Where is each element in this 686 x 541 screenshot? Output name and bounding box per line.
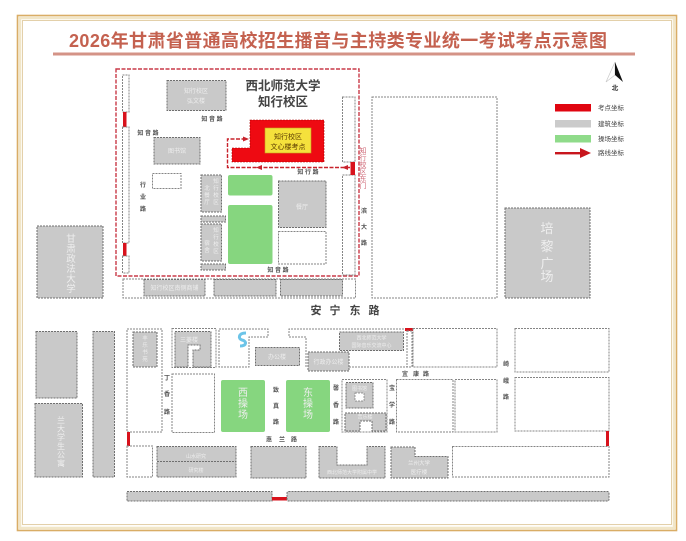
road label: 知 音 路 [137, 129, 159, 137]
south strip west [127, 492, 272, 501]
block west [127, 329, 162, 432]
building in block west [133, 332, 157, 367]
building [251, 446, 306, 478]
playground upper [228, 175, 272, 196]
far west building [36, 332, 77, 398]
road label: 宝学路 [389, 384, 395, 426]
blank plot [455, 380, 497, 432]
block with courtyard buildings [342, 380, 387, 432]
administration building [308, 352, 349, 371]
road label: 知 音 路 [201, 115, 223, 123]
arts centre building: 国际音乐交流中心 [351, 342, 392, 349]
building: Hongwen [167, 80, 226, 110]
office building [256, 348, 300, 366]
building: library: 图书馆 [168, 147, 186, 155]
title: 2026年甘肃省普通高校招生播音与主持类专业统一考试考点示意图 [69, 30, 607, 51]
office building: 办公楼 [268, 353, 286, 361]
block with L building: 三菱楼 [180, 336, 198, 344]
road label: 崎峨路 [503, 360, 509, 401]
notched building south: 医疗楼 [411, 468, 428, 476]
road label: 滨大路 [361, 207, 367, 247]
south strip east [287, 492, 609, 501]
road label: 知 行 路 [297, 168, 319, 176]
courtyard building: 图书馆 [352, 385, 367, 392]
U-shaped building south [319, 446, 385, 478]
red gate north [405, 328, 414, 331]
arts centre building [340, 332, 404, 350]
exam site label: 文心楼考点 [270, 142, 306, 151]
double building: 研究楼 [188, 467, 204, 474]
east gate [350, 162, 355, 175]
blank plot [396, 380, 453, 432]
road name: Anning East Road: 安宁东路 [310, 303, 380, 317]
east playground: 东操场 [303, 386, 313, 421]
blank plot [172, 374, 214, 432]
strip building [201, 216, 226, 222]
building: west dorm upper: 知行校区 [213, 177, 219, 206]
legend: 建筑坐标 [598, 119, 624, 128]
east side strips [342, 97, 355, 275]
road label: 丁香路 [164, 375, 170, 416]
building: canteen: 餐厅 [296, 203, 308, 211]
road label: 行业路 [140, 181, 146, 213]
building: Peili Square: 培黎广场 [540, 221, 554, 284]
blank plot [413, 328, 497, 367]
long building [93, 332, 114, 477]
legend: 考点坐标 [598, 103, 624, 112]
blank plot [515, 328, 609, 372]
shop row west: 知行校区南侧商铺 [150, 284, 199, 292]
U-shaped building south: 西北师范大学附属中学 [327, 469, 377, 476]
building: west dorm upper [201, 175, 222, 212]
road label: 宜康路 [402, 370, 429, 378]
blank plot [152, 174, 181, 188]
irregular block [289, 329, 407, 367]
route arrow [228, 136, 350, 170]
building: Gansu University of Political Science and Law [37, 226, 103, 298]
building: Hongwen: 弘文楼 [187, 97, 205, 105]
building: canteen [278, 181, 326, 228]
legend [555, 103, 624, 158]
north arrow [606, 62, 623, 92]
red gate south [272, 497, 287, 500]
icon: water feature [239, 333, 246, 346]
exam site label [265, 128, 311, 153]
building: Peili Square [505, 208, 590, 298]
building: west dorm lower: 知行校区 [213, 226, 219, 255]
administration building: 行政办公楼 [313, 358, 344, 366]
panel: lower campus [35, 328, 609, 501]
exam site building [232, 120, 324, 162]
frontage buildings [123, 279, 356, 298]
building: west dorm lower: 宿舍 [204, 239, 210, 254]
strip building [201, 264, 226, 270]
legend: 路线坐标 [598, 148, 624, 157]
road label: 馨香路 [333, 384, 339, 426]
U-shaped building: 音乐楼 [357, 414, 373, 420]
blank plot [127, 446, 152, 477]
building in block west: 丰乐书苑 [142, 334, 148, 363]
road label: 惠兰路 [266, 436, 297, 444]
campus name: 西北师范大学 [245, 78, 321, 93]
building: west dorm upper: 北餐厅 [204, 184, 210, 206]
campus subtitle: 知行校区 [258, 94, 308, 109]
shop row middle [214, 280, 276, 296]
panel: campus [116, 69, 359, 276]
block with L building [172, 328, 216, 368]
east gate label: 知行校区东门 [360, 146, 366, 190]
building: library [154, 138, 200, 164]
Lanzhou University dorm: 兰大学生公寓 [57, 415, 65, 468]
east playground [286, 380, 330, 432]
Lanzhou University dorm [35, 404, 82, 477]
building: west dorm lower [201, 224, 222, 261]
shop row west [144, 280, 205, 296]
legend: 操场坐标 [598, 134, 624, 143]
red gate west [127, 432, 130, 446]
west gates [122, 75, 129, 273]
blank plot [278, 232, 326, 264]
north arrow: 北 [612, 83, 619, 92]
road label: 致真路 [273, 386, 279, 426]
blank plot [515, 378, 609, 431]
blank plot [452, 446, 609, 477]
building: Hongwen: 知行校区 [184, 87, 208, 95]
lane [407, 331, 412, 367]
notched building south [391, 447, 448, 478]
large blank block [372, 97, 497, 298]
arts centre building: 西北师范大学 [356, 334, 387, 342]
shop row east [280, 280, 342, 296]
exam site label: 知行校区 [274, 132, 302, 141]
red gate east [606, 431, 609, 446]
building: Gansu University of Political Science and Law: 甘肃政法大学 [66, 233, 76, 295]
double building: 山水研究 [186, 453, 206, 460]
west playground: 西操场 [238, 388, 248, 421]
road label: 知 音 路 [267, 266, 289, 274]
notched building south: 兰州大学 [408, 459, 430, 467]
west playground [221, 380, 265, 432]
playground lower [228, 205, 272, 264]
block with water icon [219, 329, 268, 367]
double building [157, 446, 236, 477]
